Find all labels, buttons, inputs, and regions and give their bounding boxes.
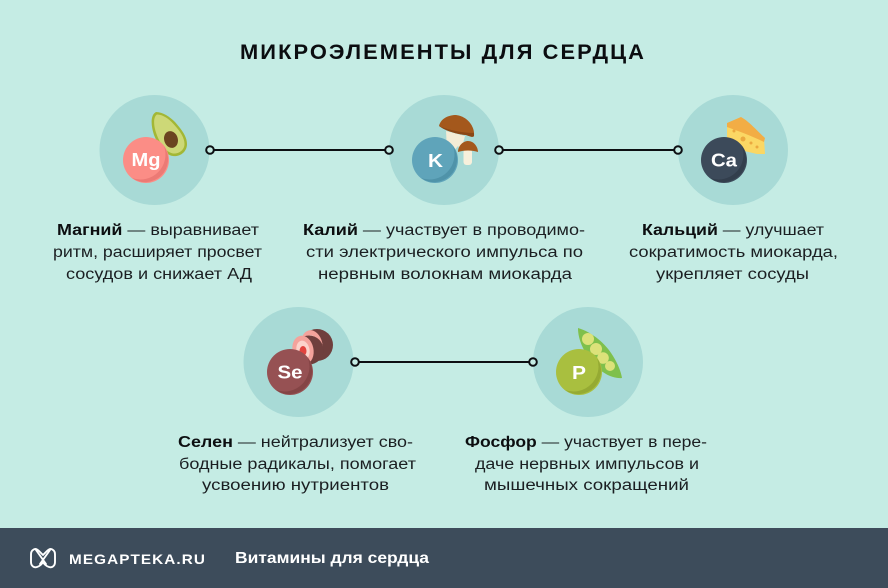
badge: Ca: Ca — [711, 150, 738, 170]
badge: Mg: Mg — [132, 149, 160, 170]
text: potassium: сти электрического импульса по — [306, 244, 583, 261]
element: potassium — [389, 95, 499, 205]
text: potassium: нервным волокнам миокарда — [318, 266, 572, 283]
icon: avocado — [152, 112, 187, 156]
element: calcium — [678, 95, 788, 205]
text: magnesium: Магний — выравнивает — [57, 222, 259, 239]
connector: magnesium to potassium — [206, 146, 393, 154]
icon: pea pod — [578, 328, 622, 378]
icon: cheese — [727, 117, 765, 154]
icon: sausage slices — [290, 328, 333, 366]
footer caption: Витамины для сердца — [235, 550, 429, 567]
text: potassium — [303, 222, 585, 283]
text: selenium — [178, 434, 416, 494]
title: МИКРОЭЛЕМЕНТЫ ДЛЯ СЕРДЦА — [240, 41, 646, 64]
badge: P: P — [572, 362, 586, 383]
icon: mushrooms — [439, 115, 478, 165]
logo wordmark: MEGAPTEKA.RU — [69, 551, 206, 567]
badge: K: K — [428, 150, 444, 171]
text: selenium: усвоению нутриентов — [202, 477, 389, 494]
footer bar — [0, 528, 888, 588]
text: selenium: Селен — нейтрализует сво- — [178, 434, 413, 451]
text: selenium: бодные радикалы, помогает — [179, 456, 416, 473]
text: calcium: сократимость миокарда, — [629, 244, 838, 261]
text: calcium: укрепляет сосуды — [656, 266, 809, 283]
text: phosphorus: дачe нервных импульсов и — [475, 456, 699, 473]
text: magnesium — [53, 222, 262, 283]
text: potassium: Калий — участвует в проводимо- — [303, 222, 585, 239]
icon: megapteka logo — [31, 549, 55, 567]
element: selenium — [244, 307, 354, 417]
connector: selenium to phosphorus — [351, 358, 537, 366]
element: phosphorus — [533, 307, 643, 417]
text: calcium — [629, 222, 838, 283]
text: phosphorus: Фосфор — участвует в пере- — [465, 434, 707, 451]
text: magnesium: ритм, расширяет просвет — [53, 244, 262, 261]
connector: potassium to calcium — [495, 146, 682, 154]
text: magnesium: сосудов и снижает АД — [66, 266, 253, 283]
badge: Se: Se — [278, 362, 302, 382]
text: calcium: Кальций — улучшает — [642, 222, 824, 239]
element: magnesium — [100, 95, 210, 205]
text: phosphorus: мышечных сокращений — [484, 477, 689, 494]
text: phosphorus — [465, 434, 707, 494]
